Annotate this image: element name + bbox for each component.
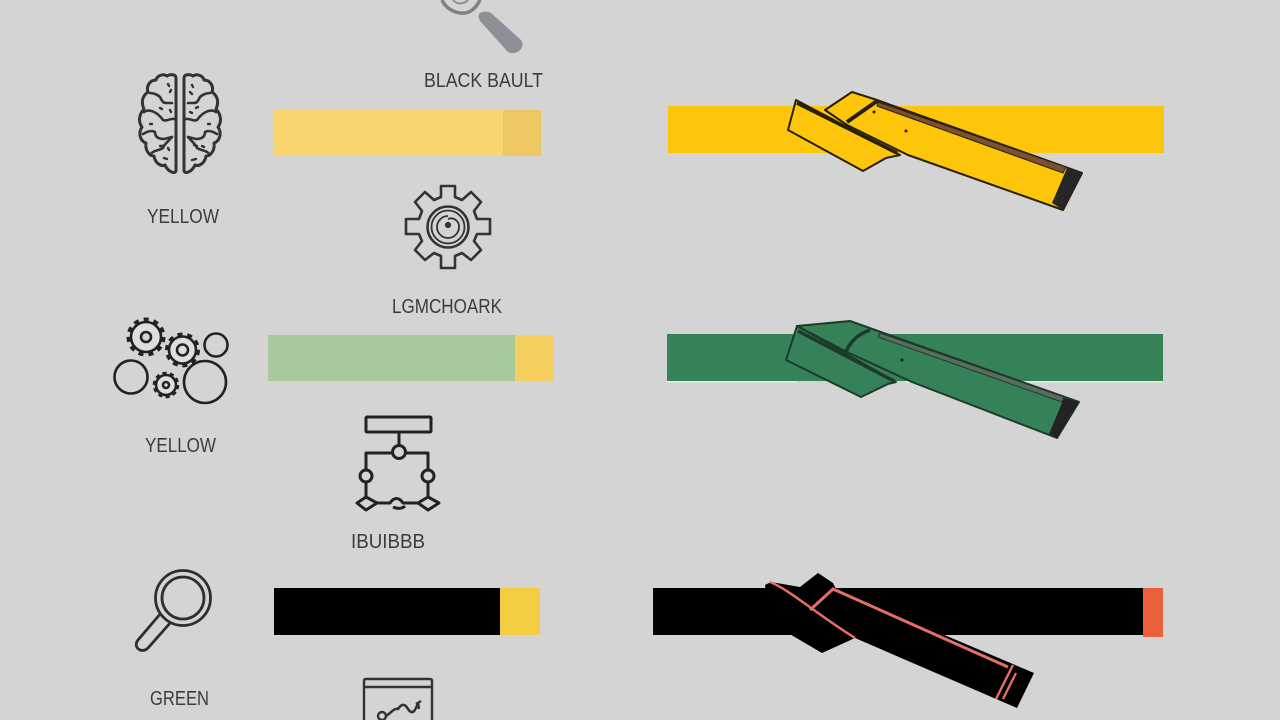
- icon: gears and circles: [114, 320, 228, 403]
- bar: black: [274, 588, 540, 635]
- label: green: GREEN: [150, 688, 209, 710]
- icon: flowchart: [357, 417, 439, 510]
- label: yellow 2: YELLOW: [145, 435, 216, 457]
- icon: brain: [140, 75, 220, 172]
- icon: gear: [406, 186, 490, 268]
- icon: chart window: [364, 679, 432, 720]
- bar: green light: [268, 335, 554, 381]
- belt: yellow: [668, 92, 1164, 210]
- belt: green: [667, 321, 1163, 438]
- icon: magnifier top: [442, 0, 523, 53]
- belt: black: [653, 573, 1163, 708]
- label: yellow 1: YELLOW: [147, 206, 219, 228]
- label: gear caption: LGMCHOARK: [392, 296, 503, 318]
- bar: yellow light: [273, 110, 541, 156]
- icon: magnifier: [136, 570, 210, 650]
- label: flowchart caption: IBUIBBB: [351, 531, 425, 553]
- label: black belt: BLACK BAULT: [424, 70, 543, 92]
